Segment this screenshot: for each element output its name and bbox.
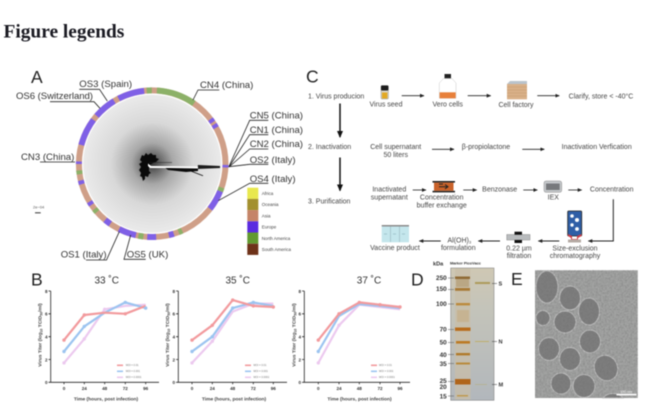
chart: 37 C: 8 xyxy=(298,289,301,294)
chart: 37 C: 0 xyxy=(298,380,301,385)
continent legend: Europe xyxy=(262,225,277,230)
icon: size-exclusion column xyxy=(568,211,582,242)
row 1 text: Vero cells xyxy=(433,101,463,108)
molecular weight labels: 150 xyxy=(436,286,447,293)
row 4 text: filtration xyxy=(507,253,531,260)
strain labels: OS2 (Italy) xyxy=(250,155,296,166)
chart: 33 C: 10 xyxy=(40,328,44,332)
step labels xyxy=(308,93,364,206)
icon: cell factory xyxy=(507,81,527,99)
chart: 35 C: 0 xyxy=(172,380,175,385)
chart: 37 C: Virus Titer (log xyxy=(292,332,298,367)
chart: 33 C: Time (hours, post infection) xyxy=(74,396,139,402)
row 4 text: Size-exclusion xyxy=(552,245,598,252)
row 3 text: Benzonase xyxy=(482,187,517,194)
panel D: silver-stained gel xyxy=(411,260,504,400)
chart: 33 C: 50 xyxy=(40,312,44,316)
molecular weight labels: 50 xyxy=(440,339,447,346)
row 2 text xyxy=(370,144,632,159)
tree disc xyxy=(83,95,221,233)
chart: 37 C: 37 ˚C xyxy=(357,275,381,287)
chart: 33 C: Virus Titer (log xyxy=(38,332,44,367)
strain labels: CN4 (China) xyxy=(200,80,253,91)
molecular weight labels xyxy=(436,275,447,400)
chart: 35 C: 2 xyxy=(172,357,175,362)
micrograph: 100 nm xyxy=(620,390,632,394)
chart: 35 C: TCID xyxy=(165,315,171,329)
continent legend: Asia xyxy=(262,213,271,218)
chart: 37 C: 96 xyxy=(397,386,403,391)
row 3 text: buffer exchange xyxy=(417,202,467,209)
chart: 35 C: 96 xyxy=(271,386,276,391)
band labels S N M: S xyxy=(498,282,502,288)
icon: filter xyxy=(507,232,530,243)
chart: 35 C: MOI = 0.0001 xyxy=(254,375,270,379)
step labels: 2. Inactivation xyxy=(308,144,351,151)
chart: 33 C: 0 xyxy=(45,380,48,385)
chart: 37 C: 48 xyxy=(357,386,362,391)
continent legend: Oceania xyxy=(262,202,279,207)
chart: 33 C: /ml) xyxy=(38,303,44,312)
strain labels: OS1 (Italy) xyxy=(61,250,107,260)
step labels: 1. Virus producion xyxy=(308,93,364,100)
callout lines xyxy=(40,89,268,260)
row 1 text: Clarify, store < -40°C xyxy=(569,92,633,100)
chart: 33 C: 33 ˚C xyxy=(94,275,119,287)
molecular weight labels: 20 xyxy=(440,384,447,391)
chart: 33 C: 72 xyxy=(123,386,128,391)
row 2 text: Cell supernatant xyxy=(370,144,421,151)
strain labels: OS4 (Italy) xyxy=(250,174,296,185)
row 4 text: chromatography xyxy=(550,253,601,260)
continent legend: North America xyxy=(262,236,291,241)
row 4 text: Vaccine product xyxy=(370,245,420,252)
row 4 text: 3 xyxy=(469,240,472,245)
step labels: 3. Purification xyxy=(308,198,351,206)
chart: 33 C: 0 xyxy=(63,386,66,391)
chart: 37 C: Time (hours, post infection) xyxy=(327,396,392,402)
chart: 35 C: 8 xyxy=(172,289,175,294)
panel label A: A xyxy=(31,67,43,87)
row 3 text: Inactivated xyxy=(372,187,406,194)
band labels S N M: N xyxy=(498,340,503,346)
chart: 33 C: 24 xyxy=(82,386,87,391)
row 4 text: formulation xyxy=(441,245,476,252)
scale bar xyxy=(33,204,45,213)
chart: 35 C: MOI = 0.01 xyxy=(254,363,267,367)
molecular weight labels: 35 xyxy=(440,361,447,368)
panel E: cryo-EM image xyxy=(511,269,638,398)
strain labels: OS6 (Switzerland) xyxy=(16,91,93,102)
panel label B: B xyxy=(31,270,43,290)
molecular weight labels: 15 xyxy=(440,394,447,400)
chart: 37 C xyxy=(292,275,410,402)
icon: IEX column xyxy=(544,181,562,192)
strain labels xyxy=(16,79,303,260)
row 3 text: Concentration xyxy=(420,195,464,202)
row 3 text: Concentration xyxy=(590,187,634,194)
strain labels: OS3 (Spain) xyxy=(79,79,132,90)
title: Figure legends xyxy=(4,22,125,43)
icon: virus seed vial xyxy=(381,86,388,99)
chart: 33 C xyxy=(38,275,159,402)
strain labels: CN1 (China) xyxy=(250,125,303,136)
strain labels: CN5 (China) xyxy=(250,110,303,122)
continent legend: South America xyxy=(262,247,291,252)
chart: 35 C: Time (hours, post infection) xyxy=(202,396,267,402)
row 3 text xyxy=(371,187,634,209)
row 1 text: Cell factory xyxy=(498,102,534,109)
panel C: manufacturing workflow xyxy=(306,66,634,260)
band labels S N M: M xyxy=(498,382,504,388)
molecular weight labels: 70 xyxy=(440,327,447,334)
chart: 35 C: 6 xyxy=(172,312,175,317)
chart: 37 C: 10 xyxy=(294,328,298,332)
chart: 33 C: MOI = 0.0001 xyxy=(126,375,142,379)
row 1 text xyxy=(370,92,633,109)
gel headers xyxy=(433,260,482,268)
chart: 33 C: 4 xyxy=(45,334,48,340)
chart: 37 C: 72 xyxy=(377,386,383,391)
chart: 37 C: 6 xyxy=(298,312,301,317)
chart: 37 C: 0 xyxy=(317,386,320,391)
chart: 33 C: 6 xyxy=(45,312,48,317)
strain labels: CN2 (China) xyxy=(250,139,303,150)
panel label E: E xyxy=(511,269,523,289)
row 3 text: IEX xyxy=(548,195,559,202)
chart: 35 C: 35 ˚C xyxy=(225,275,250,287)
chart: 35 C: Virus Titer (log xyxy=(166,332,171,367)
chart: 33 C: 96 xyxy=(143,386,149,391)
row 2 text: 50 liters xyxy=(383,152,408,159)
molecular weight ticks xyxy=(448,278,454,396)
chart: 33 C: 2 xyxy=(45,357,48,362)
chart: 37 C: 50 xyxy=(294,312,298,316)
chart: 33 C: MOI = 0.001 xyxy=(126,369,141,373)
chart: 35 C: 50 xyxy=(167,312,171,316)
icon: vero cell flask xyxy=(439,74,456,98)
chart: 33 C: 8 xyxy=(45,289,48,294)
chart: 33 C: TCID xyxy=(38,315,44,329)
chart: 37 C: MOI = 0.001 xyxy=(379,369,394,373)
gel headers: Marker PicoVacc xyxy=(450,260,482,266)
icon: vaccine vials xyxy=(382,225,409,242)
row 3 text: supernatant xyxy=(371,195,408,202)
strain labels: OS5 (UK) xyxy=(127,250,168,260)
chart: 35 C: 10 xyxy=(167,328,171,332)
gel image xyxy=(451,268,494,400)
icon: concentration cassette xyxy=(432,181,455,192)
main vertical arrows xyxy=(339,104,341,190)
chart: 37 C: MOI = 0.01 xyxy=(379,363,392,367)
chart: 37 C: /ml) xyxy=(292,303,298,312)
chart: 35 C: MOI = 0.001 xyxy=(254,369,268,373)
row 2 text: β-propiolactone xyxy=(462,144,510,151)
genome ring xyxy=(79,90,226,237)
molecular weight labels: 40 xyxy=(440,352,447,359)
panel label D: D xyxy=(411,269,424,289)
chart: 35 C: 24 xyxy=(210,386,215,391)
tree branches xyxy=(139,153,220,181)
row 4 text: 0.22 µm xyxy=(506,245,532,252)
chart: 37 C: TCID xyxy=(292,315,298,329)
chart: 35 C: 48 xyxy=(230,386,236,391)
molecular weight labels: 25 xyxy=(440,378,447,385)
molecular weight labels: 250 xyxy=(436,275,447,282)
continent legend xyxy=(247,188,291,255)
row 4 text xyxy=(370,237,601,260)
panel A: phylogenetic tree xyxy=(16,67,303,260)
molecular weight labels: 100 xyxy=(436,301,447,308)
continent legend: Africa xyxy=(262,191,274,196)
chart: 35 C: 72 xyxy=(251,386,256,391)
row 4 text: Al(OH) xyxy=(447,237,469,244)
chart: 37 C: MOI = 0.0001 xyxy=(379,375,395,379)
chart: 35 C: 4 xyxy=(172,334,175,340)
row 2 text: Inactivation Verfication xyxy=(562,144,632,151)
gel headers: kDa xyxy=(433,262,444,268)
workflow arrows xyxy=(402,96,613,241)
row 1 text: Virus seed xyxy=(370,101,403,108)
chart: 33 C: 48 xyxy=(102,386,108,391)
chart: 37 C: 24 xyxy=(336,386,342,391)
chart: 33 C: MOI = 0.01 xyxy=(126,363,139,367)
chart: 35 C: /ml) xyxy=(165,303,171,312)
chart: 37 C: 4 xyxy=(298,334,301,340)
chart: 35 C xyxy=(165,275,287,402)
chart: 37 C: 2 xyxy=(298,357,301,362)
panel B: growth curves xyxy=(31,270,410,402)
chart: 35 C: 0 xyxy=(191,386,194,391)
scale bar: 2e−04 xyxy=(33,204,45,210)
band labels S N M xyxy=(492,282,504,388)
strain labels: CN3 (China) xyxy=(21,152,74,163)
panel label C: C xyxy=(306,66,319,86)
